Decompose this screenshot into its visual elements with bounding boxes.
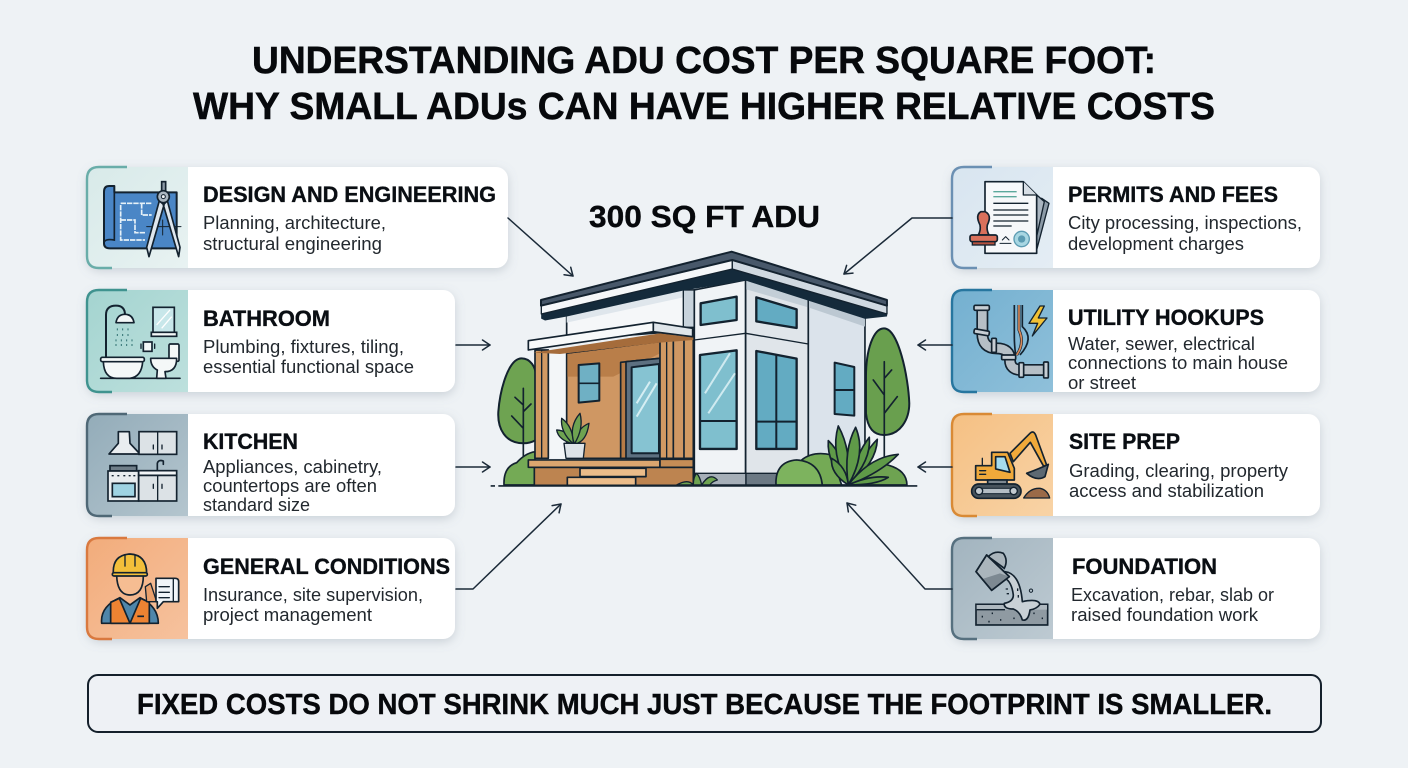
icon: blueprint and compass — [104, 182, 181, 257]
illustration: small ADU house — [491, 252, 917, 486]
title: WHY SMALL ADUs CAN HAVE HIGHER RELATIVE COSTS — [193, 86, 1215, 128]
text: permits description: City processing, inspections, — [1068, 213, 1302, 233]
heading: permits and fees: PERMITS AND FEES — [1068, 182, 1278, 207]
text: kitchen description: Appliances, cabinetry, — [203, 457, 382, 477]
arrow: bathroom to house — [456, 344, 490, 346]
text: kitchen description: countertops are often — [203, 476, 377, 496]
heading: design and engineering: DESIGN AND ENGINEERING — [203, 182, 496, 207]
ground line — [491, 483, 917, 488]
text: general conditions description: project management — [203, 605, 372, 625]
heading: site prep: SITE PREP — [1069, 429, 1180, 454]
text: kitchen description — [203, 457, 382, 515]
text: kitchen description: standard size — [203, 495, 310, 515]
text: permits description: development charges — [1068, 234, 1244, 254]
tree: left — [498, 358, 536, 485]
roof — [541, 252, 887, 320]
icon: pipes and wires — [974, 305, 1048, 378]
text: design description: Planning, architecture, — [203, 213, 386, 233]
potted plant — [557, 413, 589, 458]
arrow: foundation to house — [847, 503, 952, 589]
title — [193, 40, 1215, 128]
text: utility description: Water, sewer, electrical — [1068, 334, 1255, 354]
arrow: site prep to house — [918, 466, 952, 468]
text: site prep description — [1069, 461, 1288, 501]
icon: bathroom fixtures — [101, 306, 180, 378]
panel: permits and fees — [952, 167, 1320, 268]
heading: general conditions: GENERAL CONDITIONS — [203, 554, 450, 579]
text: site prep description: Grading, clearing, property — [1069, 461, 1288, 481]
text: bathroom description — [203, 337, 414, 377]
title: UNDERSTANDING ADU COST PER SQUARE FOOT: — [252, 40, 1156, 82]
callout: bottom message: FIXED COSTS DO NOT SHRINK MUCH JUST BECAUSE THE FOOTPRINT IS SMALLER. — [137, 689, 1272, 721]
callout: bottom message — [88, 675, 1321, 732]
text: design description — [203, 213, 386, 254]
heading: kitchen: KITCHEN — [203, 429, 298, 454]
panel: utility hookups — [952, 290, 1320, 393]
panel: bathroom — [87, 290, 455, 392]
text: site prep description: access and stabilization — [1069, 481, 1264, 501]
arrow: permits to house — [844, 218, 952, 274]
panel: kitchen — [87, 414, 455, 516]
arrow: general conditions to house — [456, 504, 561, 589]
panel: general conditions — [87, 538, 455, 639]
text: design description: structural engineering — [203, 234, 382, 254]
text: utility description — [1068, 334, 1288, 393]
icon: kitchen appliances — [108, 432, 177, 501]
text: bathroom description: essential functional space — [203, 357, 414, 377]
icon: site supervisor — [102, 554, 179, 623]
arrow: design to house — [508, 218, 573, 276]
icon: permit papers and stamp — [970, 182, 1049, 253]
windows — [700, 297, 854, 449]
icon: concrete pour — [976, 552, 1048, 625]
heading: bathroom: BATHROOM — [203, 306, 330, 331]
text: utility description: or street — [1068, 373, 1136, 393]
arrow: kitchen to house — [456, 466, 490, 468]
icon: excavator — [972, 432, 1050, 498]
heading: 300 sq ft adu: 300 SQ FT ADU — [589, 199, 820, 234]
panel: site prep — [952, 414, 1320, 516]
panel: design and engineering — [87, 167, 508, 268]
arrow: utilities to house — [918, 344, 952, 346]
heading: foundation: FOUNDATION — [1072, 554, 1217, 579]
text: bathroom description: Plumbing, fixtures, tiling, — [203, 337, 404, 357]
shrubs — [677, 426, 907, 485]
text: foundation description — [1071, 585, 1274, 625]
walls — [548, 280, 865, 485]
text: foundation description: raised foundation work — [1071, 605, 1259, 625]
porch and door — [528, 322, 693, 458]
tree: right — [866, 328, 909, 485]
text: utility description: connections to main house — [1068, 353, 1288, 373]
text: permits description — [1068, 213, 1302, 254]
text: foundation description: Excavation, rebar, slab or — [1071, 585, 1274, 605]
heading: utility hookups: UTILITY HOOKUPS — [1068, 305, 1264, 330]
text: general conditions description — [203, 585, 423, 625]
text: general conditions description: Insurance, site supervision, — [203, 585, 423, 605]
deck and steps — [528, 459, 693, 485]
panel: foundation — [952, 538, 1320, 639]
